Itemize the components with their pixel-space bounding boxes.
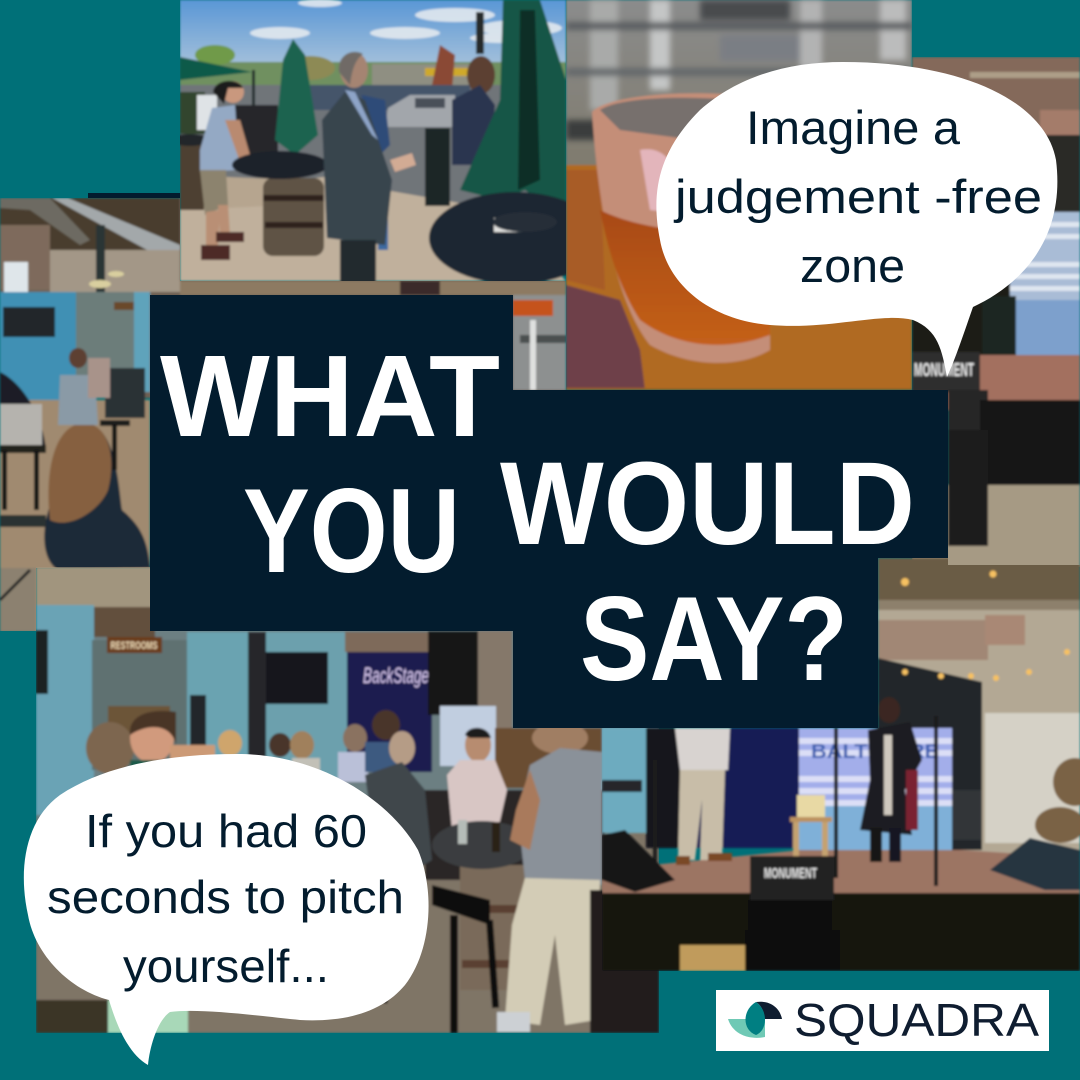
- backstage backdrop: BackStage: [363, 663, 429, 688]
- man in tee: [200, 81, 258, 260]
- bubble text line 2: seconds to pitch: [47, 871, 404, 923]
- event banner: [799, 728, 952, 850]
- speech bubble: judgement-free zone: [656, 62, 1057, 377]
- photo: networking crowd in the bar: [36, 567, 659, 1033]
- audience member: seated woman in black top: [44, 423, 150, 570]
- barrel table left: [180, 145, 204, 210]
- man in white shirt behind: [197, 95, 217, 130]
- bubble text line 3: yourself...: [123, 940, 329, 992]
- photo: stage backdrop and monitor speaker: MONUMENT: [914, 360, 974, 380]
- backstage backdrop: [347, 652, 432, 772]
- center umbrella: [275, 39, 318, 155]
- guest in patterned shirt: [447, 728, 507, 830]
- bubble text line 3: zone: [800, 239, 905, 292]
- man at right in navy: [452, 56, 495, 165]
- photo: beer glass on a wooden table: [566, 0, 912, 390]
- title: YOU: YOU: [243, 464, 460, 598]
- man in blue shirt behind jacket: [362, 95, 390, 160]
- right umbrella: [460, 0, 566, 222]
- small dark strip: [88, 193, 180, 198]
- barrel table with drinks: [432, 820, 532, 990]
- photo: speaker on stage with banner: [602, 558, 1080, 971]
- man standing with paper: [675, 728, 732, 865]
- wine barrels: [1035, 758, 1080, 843]
- wooden spool table: [428, 190, 566, 281]
- title: SAY?: SAY?: [580, 572, 848, 706]
- speech bubble: 60 second pitch: [24, 754, 429, 1065]
- guests in the crowd: [86, 710, 400, 782]
- stage monitor speakers: [602, 830, 1080, 892]
- clouds: [250, 0, 562, 43]
- barrel table center: [232, 151, 328, 256]
- bubble text line 2: judgement -free: [673, 170, 1042, 223]
- string lights: [901, 570, 1070, 681]
- speaker woman with microphone: [860, 697, 922, 862]
- photo: outdoor patio with barrel tables and umbrellas: [180, 0, 566, 281]
- monument box: MONUMENT: [764, 865, 817, 882]
- bubble text line 1: If you had 60: [85, 805, 367, 857]
- restrooms sign: RESTROOMS: [110, 640, 158, 652]
- logo: Squadra: [716, 990, 1049, 1051]
- restrooms sign: [107, 637, 162, 653]
- logo icon: [728, 1002, 782, 1038]
- photo: stage backdrop and monitor speaker: [912, 57, 1080, 567]
- photo: brewery interior with seated audience: [0, 198, 566, 632]
- title: WOULD: WOULD: [500, 438, 915, 570]
- suit guest: [365, 731, 432, 880]
- event banner: BALTIMORE: [811, 741, 939, 763]
- beer glass: [592, 93, 770, 363]
- black metal stool: [379, 885, 499, 1033]
- monument box: [745, 856, 840, 971]
- stool with candles: [790, 795, 832, 856]
- guest in grey tee and cream trousers: [497, 722, 602, 1032]
- title: WHAT: WHAT: [160, 331, 500, 461]
- title panel: [150, 295, 948, 728]
- man in grey jacket: [322, 52, 416, 285]
- logo wordmark: SQUADRA: [794, 994, 1039, 1046]
- parked silver car: [385, 95, 455, 127]
- bubble text line 1: Imagine a: [746, 101, 961, 154]
